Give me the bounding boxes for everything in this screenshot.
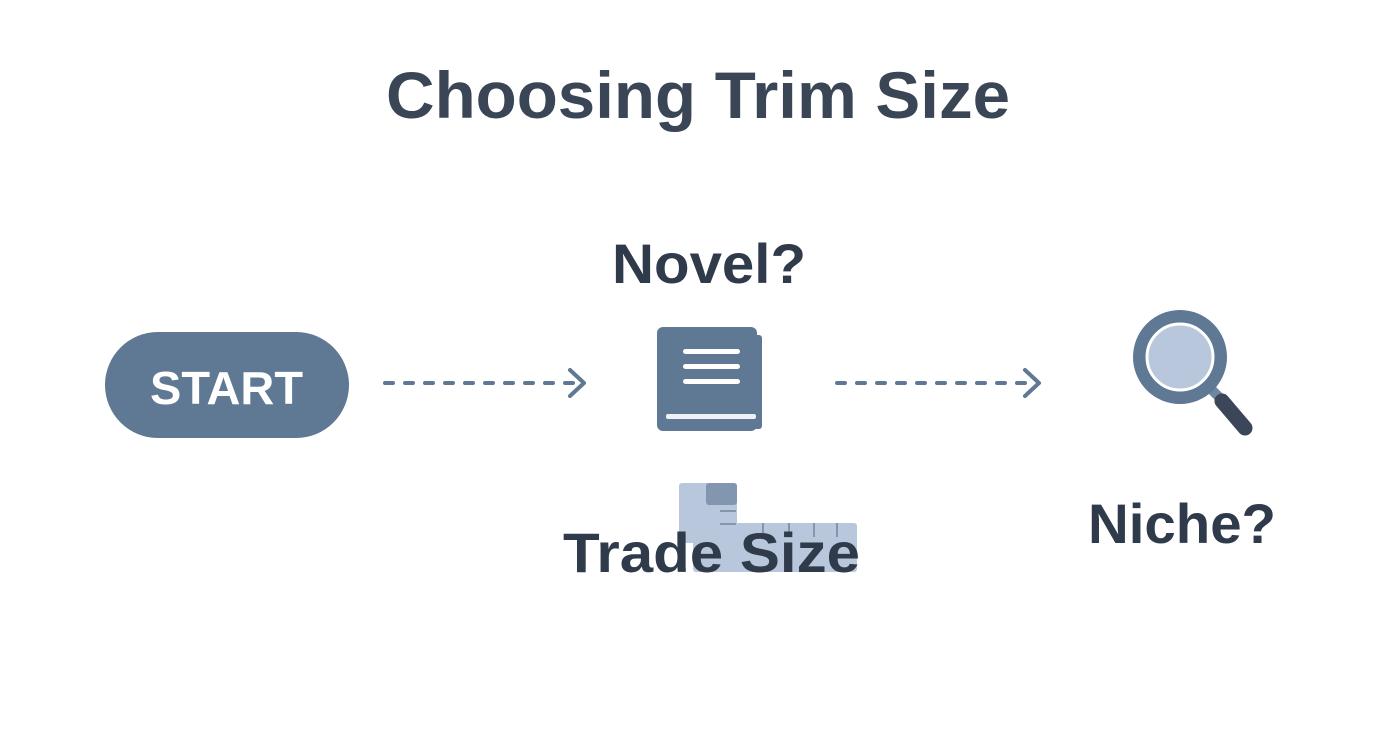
arrow: novel to niche [837,370,1039,396]
arrow: start to novel [385,370,584,396]
heading: novel: Novel? [612,232,806,295]
icon: magnifier [1140,317,1245,428]
heading: trade size: Trade Size [563,521,860,584]
start pill: START [150,362,303,414]
icon: ruler [679,483,857,572]
start pill [105,332,349,438]
title: Choosing Trim Size [386,58,1010,132]
heading: niche: Niche? [1088,492,1276,555]
icon: book [657,327,762,431]
